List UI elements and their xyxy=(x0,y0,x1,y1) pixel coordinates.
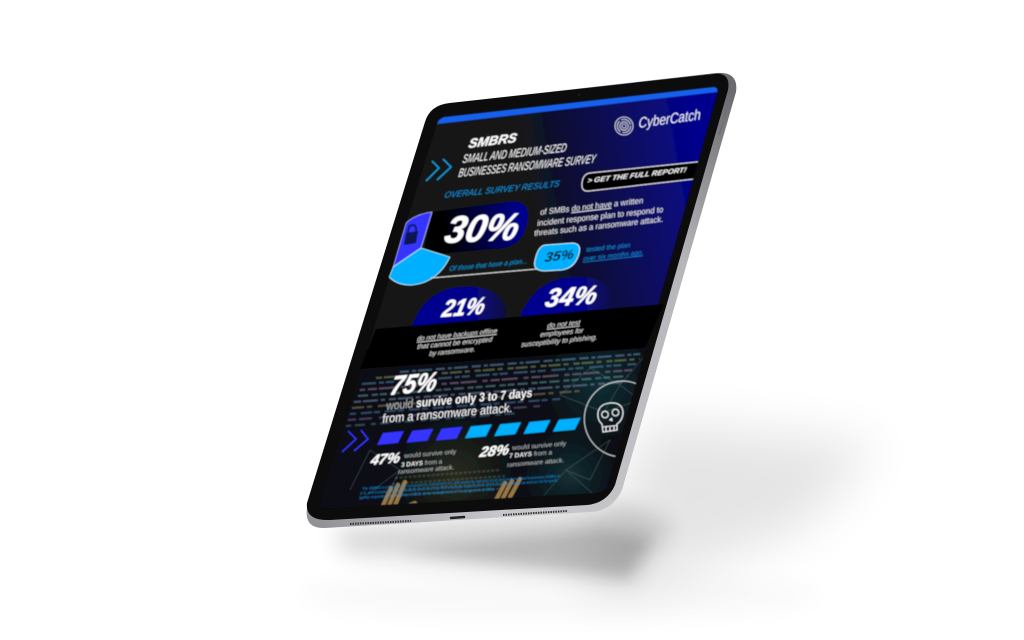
text: tested the plan xyxy=(583,242,644,263)
text: of those that have a plan: Of those that have a plan... xyxy=(449,257,528,273)
button: get the full report xyxy=(580,160,699,193)
charging port xyxy=(451,517,464,518)
text: survive: would survive only 3 to 7 days xyxy=(385,386,533,413)
35% pill xyxy=(534,243,580,271)
speaker grille left xyxy=(350,521,411,524)
connector line xyxy=(431,269,537,278)
text: phishing xyxy=(521,320,598,349)
pie: blue slice xyxy=(389,248,450,285)
footnote xyxy=(359,474,560,500)
tablet mockup scene xyxy=(306,72,862,612)
screen xyxy=(300,87,720,530)
text: 30 percent description: of SMBs do not have a written xyxy=(540,195,644,217)
photo panel: code and keyboard background xyxy=(320,347,646,508)
stat: 75%: 75% xyxy=(388,366,441,401)
progress blocks xyxy=(377,418,581,445)
camera xyxy=(578,94,580,96)
text: tested the plan: over six months ago. xyxy=(583,249,644,263)
text: backups xyxy=(417,328,498,358)
footnote: U.S. and Canada. SMB respondents were less than 500 employee organizations and included for-profits as well as not-for-profit. xyxy=(360,479,558,495)
stat: 47%: ransomware attack. xyxy=(398,464,455,476)
screen background xyxy=(320,91,718,508)
title: BUSINESSES RANSOMWARE SURVEY xyxy=(457,152,598,180)
hands xyxy=(381,479,520,510)
keyboard xyxy=(386,470,510,496)
21% blob: 21% xyxy=(439,293,488,323)
stat: 28%: 28% xyxy=(477,443,511,461)
icon: chevrons top xyxy=(426,159,451,181)
30% stat pill: 30% xyxy=(441,206,524,252)
stat: 47%: 47% xyxy=(368,451,402,469)
text: phishing: employees for xyxy=(540,328,584,339)
drop shadow xyxy=(300,420,880,620)
title: SMALL AND MEDIUM-SIZED xyxy=(461,141,568,166)
text: 30 percent description xyxy=(534,195,664,238)
stat: 47%: would survive only xyxy=(403,449,457,460)
tablet body xyxy=(307,73,736,528)
stat: 28% xyxy=(477,440,567,469)
text: phishing: do not test xyxy=(547,320,582,330)
side buttons xyxy=(719,103,727,135)
21% blob xyxy=(412,287,506,326)
text: 30 percent description: threats such as a ransomware attack. xyxy=(534,214,664,238)
text: backups: do not have backups offline xyxy=(417,328,498,343)
logo: CyberCatch xyxy=(615,107,702,135)
34% blob xyxy=(520,277,616,316)
text: 30 percent description: incident response plan to respond to xyxy=(537,204,664,228)
stat: 47%: 3 DAYS from a xyxy=(401,459,443,469)
stat: 75%: from a ransomware attack. xyxy=(382,401,513,426)
stat: 28%: would survive only xyxy=(511,440,567,452)
top blue bar xyxy=(437,87,718,124)
button: get the full report: > GET THE FULL REPORT! xyxy=(587,165,688,185)
heading: overall survey results: OVERALL SURVEY RESULTS xyxy=(444,179,561,200)
stat: 28%: 7 DAYS from a xyxy=(509,449,553,460)
text: phishing: susceptibility to phishing. xyxy=(521,334,598,349)
text: tested the plan: tested the plan xyxy=(586,242,631,254)
speaker grille right xyxy=(503,511,567,515)
icon: chevrons lower xyxy=(342,430,368,452)
footnote: The SMBRS is a blind survey conducted by CyberCatch of 1,200 randomly selected small and medium-sized businesses (SMBs) in xyxy=(362,474,560,491)
logo: CyberCatch: CyberCatch xyxy=(637,107,702,132)
black band xyxy=(360,304,664,369)
footnote: Survey respondents were owners, CISOs, senior management or IT management at SMBs. xyxy=(359,487,495,500)
pie: lock slice xyxy=(393,212,432,267)
icon: skull xyxy=(598,403,623,432)
stat: 47% xyxy=(368,449,457,476)
35% pill: 35% xyxy=(543,247,575,265)
34% blob: 34% xyxy=(543,280,601,313)
text: backups: by ransomware. xyxy=(429,346,476,358)
stat: 75% xyxy=(382,366,533,426)
stat: 28%: ransomware attack. xyxy=(507,457,565,469)
network lines xyxy=(349,356,644,501)
icon: lock xyxy=(404,225,418,245)
title: SMBRS xyxy=(467,130,519,151)
skull circle xyxy=(584,381,636,457)
text: backups: that cannot be encrypted xyxy=(417,336,494,351)
title xyxy=(457,130,598,180)
